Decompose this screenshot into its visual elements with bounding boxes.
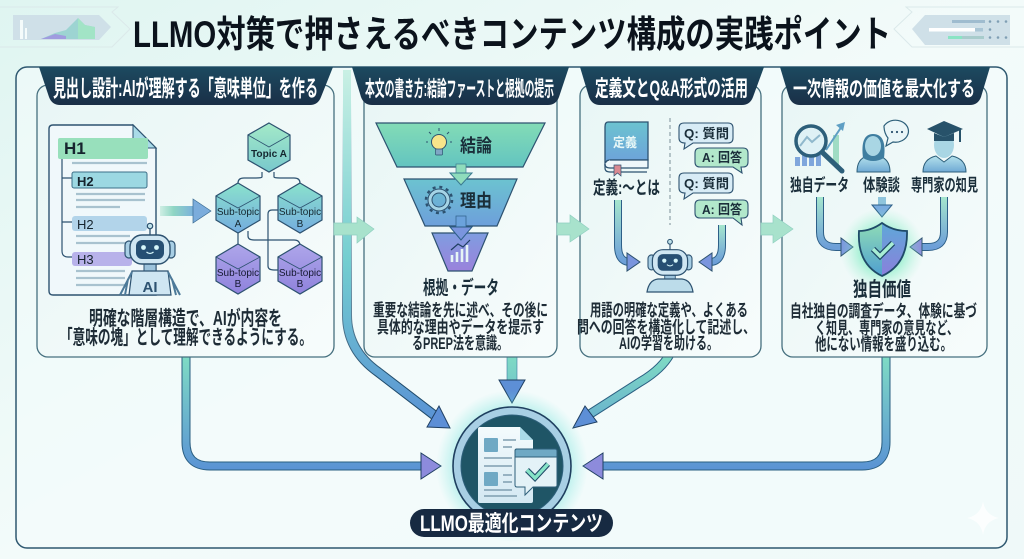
arrow: Q&A to robot <box>699 225 722 271</box>
hub label pill: LLMO最適化コンテンツ <box>420 511 603 536</box>
arrow: conclusion to reason <box>450 164 472 185</box>
dashed divider <box>669 118 671 225</box>
panel 3 description: 用語の明確な定義や、よくある <box>590 301 748 320</box>
heading banner <box>352 67 569 105</box>
bubble: answer 1: A: 回答 <box>702 150 742 165</box>
funnel tier: reason <box>404 179 517 226</box>
panel 1 description: 「意味の塊」として理解できるようにする。 <box>60 326 312 349</box>
unique value label: 独自価値 <box>853 278 911 301</box>
panel 4 description <box>790 301 977 354</box>
hex: Sub-topic A: Sub-topic <box>217 207 259 218</box>
arrow: panel 1 to panel 2 <box>334 217 374 243</box>
icon: data magnifier <box>795 122 845 171</box>
document outline icon: H2 <box>77 217 94 232</box>
panel 1 description: 明確な階層構造で、AIが内容を <box>89 306 282 330</box>
arrow: definition to robot <box>618 200 640 271</box>
bubble: answer 1 <box>695 148 748 173</box>
panel box <box>37 85 334 357</box>
hex: Sub-topic B lower left: B <box>235 279 242 290</box>
hex: Sub-topic B lower left <box>216 244 260 294</box>
heading text: 定義文とQ&A形式の活用 <box>595 76 748 101</box>
heading banner <box>780 67 990 105</box>
panel 3 description: AIの学習を助ける。 <box>619 333 718 353</box>
panel 3 description <box>577 301 755 353</box>
panel 2 description <box>373 300 548 353</box>
arrow: data to shield <box>820 197 853 256</box>
arrow: panel 3 to panel 4 <box>761 215 793 243</box>
panel: definitions and Q&A <box>577 67 764 357</box>
hex: Sub-topic A <box>216 183 260 233</box>
arrow: experience to shield <box>872 197 892 217</box>
bubble: question 2 <box>679 173 733 199</box>
connector: panel 3 to centre <box>573 350 672 428</box>
hex: Sub-topic B lower left: Sub-topic <box>217 268 259 279</box>
hex: Sub-topic B upper: Sub-topic <box>279 207 321 218</box>
arrow: reason to evidence <box>450 216 472 240</box>
panel: body writing: 本文の書き方:結論ファーストと根拠の提示 <box>365 78 554 101</box>
icon: robot reader <box>647 239 693 292</box>
hex: Topic A: Topic A <box>251 148 287 160</box>
panel 2 description: 重要な結論を先に述べ、その後に <box>373 300 548 320</box>
icon: AI robot <box>120 223 180 296</box>
icon: experience person <box>857 120 908 172</box>
heading text: 見出し設計:AIが理解する「意味単位」を作る <box>53 75 318 101</box>
panel 4 description: 他にない情報を盛り込む。 <box>815 334 952 354</box>
icon: AI robot: AI <box>142 279 158 296</box>
source labels: 独自データ <box>790 175 849 195</box>
heading banner <box>39 67 333 105</box>
icon: sparkle watermark <box>967 501 999 535</box>
source labels: 体験談 <box>863 176 900 195</box>
panel box <box>580 85 761 357</box>
panel 2 description: るPREP法を意識。 <box>412 334 508 353</box>
panel 3 description: 問への回答を構造化して記述し、 <box>577 317 755 337</box>
icon: definition book <box>605 122 648 176</box>
arrow: document to topic tree <box>160 199 211 223</box>
hex: Sub-topic B lower right <box>278 244 322 294</box>
evidence label: 根拠・データ <box>423 276 499 299</box>
document outline icon <box>49 125 156 295</box>
hex: Sub-topic A: A <box>235 219 242 230</box>
panel: first-party information <box>780 67 990 357</box>
icon: expert with cap <box>923 121 966 172</box>
bubble: question 1: Q: 質問 <box>684 126 729 141</box>
panel 1 description <box>60 306 312 349</box>
hex: Topic A <box>248 123 290 172</box>
source labels <box>790 175 978 195</box>
hub checked window icon <box>515 449 557 495</box>
funnel tier: conclusion: 結論 <box>460 136 492 156</box>
bubble: question 1 <box>679 123 733 149</box>
arrow: expert to shield <box>910 197 944 256</box>
topic tree connectors <box>238 172 300 270</box>
header decoration: right data plate <box>894 7 1024 47</box>
bubble: answer 2: A: 回答 <box>702 202 742 217</box>
icon: unique value shield <box>840 208 924 292</box>
funnel tier: conclusion <box>376 123 545 167</box>
panel: body writing <box>352 67 569 357</box>
header decoration: left data plate <box>0 7 130 47</box>
funnel tier: reason: 理由 <box>460 191 492 211</box>
panel: heading design <box>37 67 334 357</box>
document outline icon: H2 <box>77 174 94 189</box>
panel box <box>782 85 987 357</box>
definition label: 定義:〜とは <box>593 178 660 198</box>
document outline icon: H3 <box>77 252 94 267</box>
connector: panel 2 to centre <box>499 352 525 403</box>
hex: Sub-topic B upper <box>278 183 322 233</box>
hex: Sub-topic B lower right: B <box>297 279 304 290</box>
source labels: 専門家の知見 <box>911 175 978 195</box>
panel 2 description: 具体的な理由やデータを提示す <box>377 317 544 337</box>
funnel tier: evidence <box>432 233 488 271</box>
bubble: answer 2 <box>695 200 748 225</box>
panel box <box>364 85 557 357</box>
central hub: optimized content <box>436 390 588 542</box>
connector: panel 4 to centre <box>583 352 886 479</box>
arrow: panel 2 to panel 3 <box>557 215 589 242</box>
connector: panel 1 to centre <box>186 352 441 479</box>
connector: pipe from heading panel into centre <box>347 70 450 428</box>
bubble: question 2: Q: 質問 <box>684 176 729 191</box>
hex: Sub-topic B lower right: Sub-topic <box>279 268 321 279</box>
hub document icon <box>478 427 533 503</box>
heading banner <box>580 67 764 105</box>
hex: Sub-topic B upper: B <box>297 219 304 230</box>
document outline icon: H1 <box>64 139 86 158</box>
icon: definition book: 定義 <box>613 135 637 150</box>
